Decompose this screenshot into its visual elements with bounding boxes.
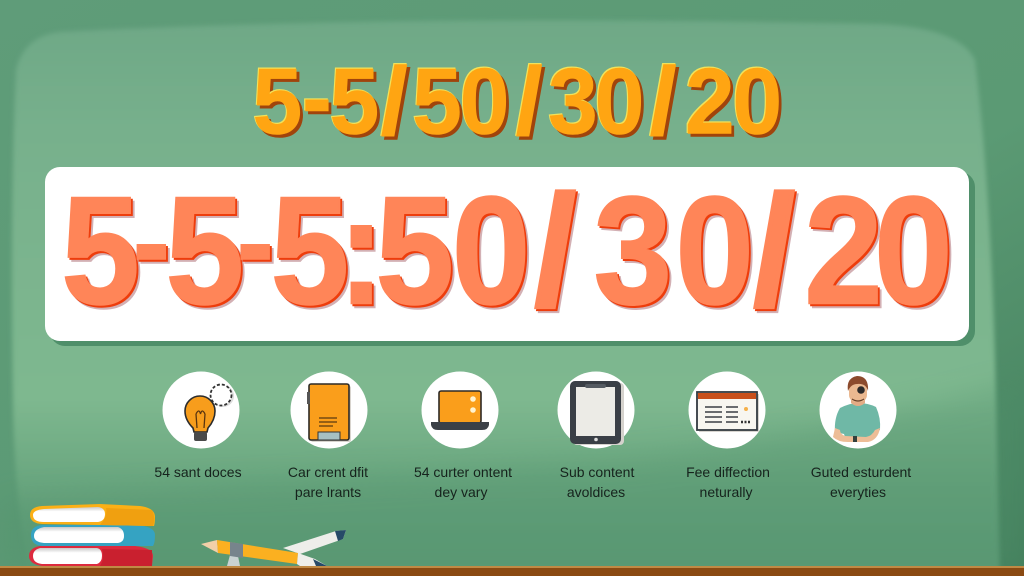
icon: browser window — [688, 372, 766, 448]
label: Fee diffection neturally: Fee diffection — [686, 464, 770, 480]
label: 54 curter ontent dey vary: dey vary — [435, 484, 487, 500]
white banner — [45, 167, 975, 346]
label: Car crent dfit pare lrants: pare lrants — [295, 484, 361, 500]
icon: orange notebook — [290, 372, 368, 448]
title: 5-5/50/30/20 — [253, 45, 782, 154]
icon: tablet — [558, 372, 634, 448]
label: Guted esturdent everyties — [811, 464, 911, 500]
pencil and pen — [201, 530, 346, 566]
wooden ledge — [0, 566, 1024, 576]
label: Car crent dfit pare lrants: Car crent dfit — [288, 464, 368, 480]
stack of books — [29, 504, 155, 566]
label: Guted esturdent everyties: Guted esturdent — [811, 464, 911, 480]
banner headline: 5-5-5:50/30/20 — [63, 167, 955, 339]
label: Fee diffection neturally — [686, 464, 770, 500]
icon: laptop — [422, 372, 498, 448]
icon: student person — [820, 372, 896, 448]
label: 54 sant doces: 54 sant doces — [154, 464, 242, 480]
label: Car crent dfit pare lrants — [288, 464, 368, 500]
label: 54 curter ontent dey vary — [414, 464, 512, 500]
title: 5-5/50/30/20 — [252, 44, 781, 153]
label: Fee diffection neturally: neturally — [700, 484, 752, 500]
label: Sub content avoldices — [560, 464, 634, 500]
banner headline: 5-5-5:50/30/20 — [65, 169, 956, 341]
title: 5-5/50/30/20 — [256, 48, 785, 157]
icon: light bulb — [162, 372, 240, 448]
banner headline: 5-5-5:50/30/20 — [61, 165, 953, 337]
label: Sub content avoldices: Sub content — [560, 464, 634, 480]
label: Sub content avoldices: avoldices — [567, 484, 625, 500]
label: 54 curter ontent dey vary: 54 curter ontent — [414, 464, 512, 480]
label: Guted esturdent everyties: everyties — [830, 484, 886, 500]
